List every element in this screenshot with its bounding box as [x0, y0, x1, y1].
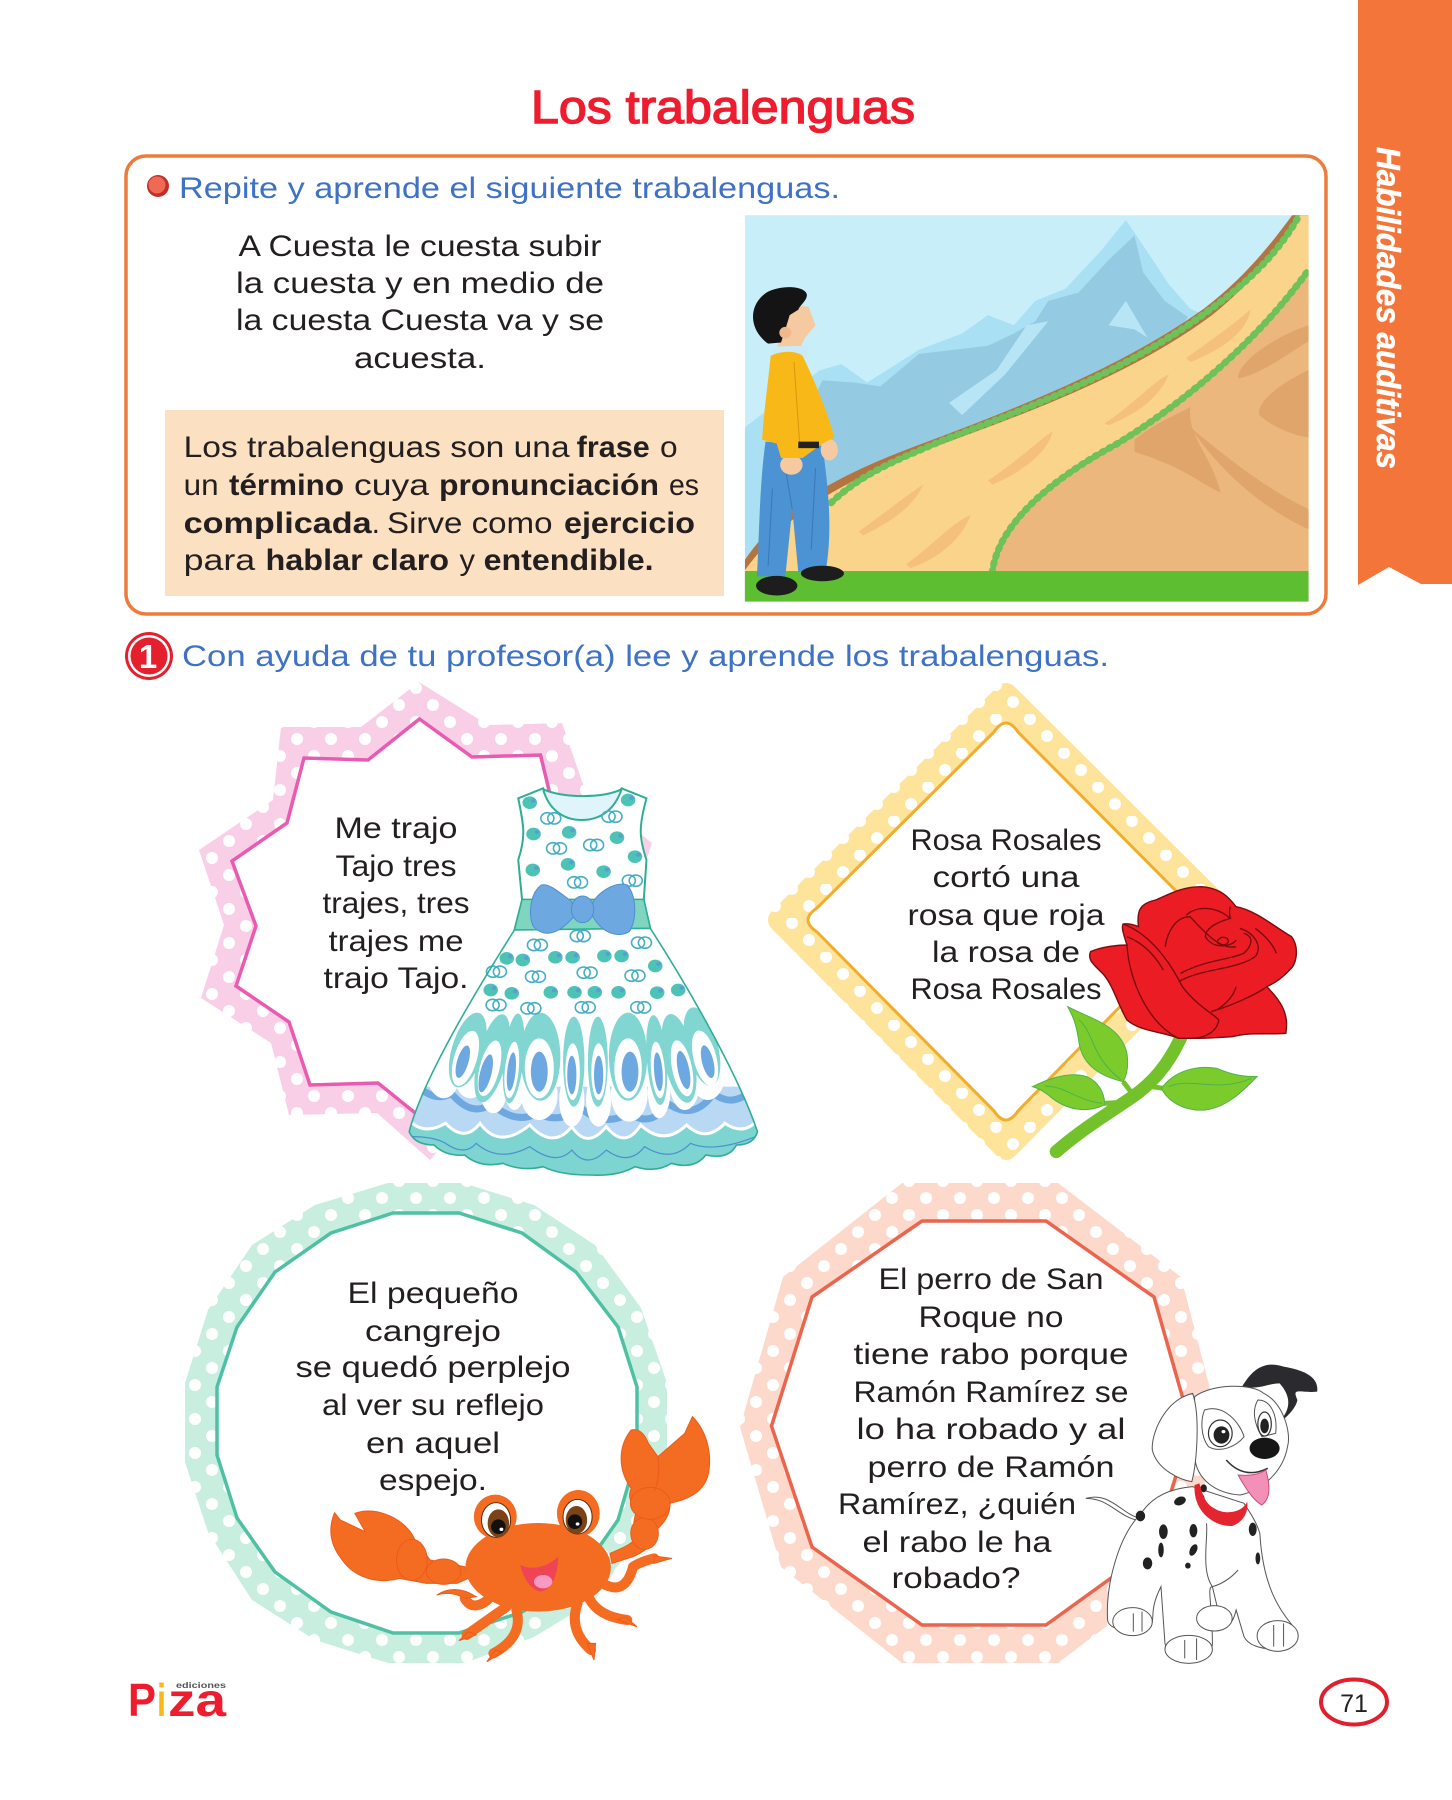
definition callout: y [460, 544, 475, 577]
page number: 71 [1340, 1690, 1368, 1718]
star text: trajes, tres [322, 887, 470, 920]
panel: intro [126, 156, 1326, 614]
diamond text: Rosa Rosales [910, 973, 1102, 1006]
definition callout: entendible. [484, 544, 654, 577]
definition callout: cuya [354, 469, 429, 502]
tongue twister text: A Cuesta le cuesta subir [238, 230, 602, 263]
star text [322, 812, 470, 995]
illustration: crab [331, 1417, 710, 1662]
illustration: dress [407, 788, 759, 1180]
decagon text: perro de Ramón [868, 1451, 1114, 1484]
dress print dots and rings [483, 794, 685, 1014]
diamond frame [780, 695, 1232, 1148]
definition callout: término [229, 469, 344, 502]
dress bow [530, 884, 635, 935]
panel: round tongue twister [185, 1183, 710, 1663]
definition callout: pronunciación [439, 469, 659, 502]
decagon text: Roque no [918, 1301, 1064, 1334]
definition callout: es [669, 469, 699, 502]
logo: Piza ediciones: za [168, 1674, 226, 1726]
round text: se quedó perplejo [296, 1351, 570, 1384]
round frame [185, 1183, 667, 1663]
logo: Piza ediciones [128, 1674, 226, 1726]
diamond text: Rosa Rosales [910, 824, 1102, 857]
definition callout: para [184, 544, 256, 577]
icon: number 1 badge [125, 632, 173, 680]
tongue twister text: acuesta. [354, 342, 486, 375]
star text: trajes me [328, 925, 464, 958]
tongue twister text [236, 230, 604, 375]
definition callout: Los trabalenguas son una [184, 431, 570, 464]
decagon text: tiene rabo porque [854, 1338, 1128, 1371]
panel: decagon tongue twister [740, 1183, 1317, 1663]
decagon text: Ramírez, ¿quién [838, 1488, 1076, 1521]
side tab: Habilidades auditivas [1358, 0, 1452, 585]
panel frame [126, 156, 1326, 614]
tongue twister text: la cuesta Cuesta va y se [236, 304, 604, 337]
decagon text: El perro de San [878, 1263, 1104, 1296]
definition callout: ejercicio [564, 507, 695, 540]
star frame [199, 682, 652, 1160]
decagon text: el rabo le ha [862, 1526, 1052, 1559]
definition callout: frase [577, 431, 650, 464]
illustration: dalmatian puppy [1086, 1365, 1317, 1663]
logo: Piza ediciones: i [157, 1674, 166, 1726]
diamond text: la rosa de [932, 936, 1080, 969]
diamond text: rosa que roja [908, 899, 1105, 932]
peacock feather pattern [441, 1005, 727, 1107]
icon: red bullet [147, 175, 169, 197]
definition callout: . [372, 507, 380, 540]
decagon frame [740, 1183, 1220, 1663]
icon: number 1 badge: 1 [139, 638, 157, 675]
definition callout: complicada [184, 507, 372, 540]
diamond text: cortó una [932, 861, 1080, 894]
diamond text [908, 824, 1105, 1006]
definition callout: Sirve como [387, 507, 552, 540]
activity heading: Con ayuda de tu profesor(a) lee y aprende los trabalenguas. [182, 640, 1109, 673]
star text: trajo Tajo. [324, 962, 468, 995]
page number [1321, 1680, 1387, 1724]
round text [296, 1277, 570, 1497]
round text: cangrejo [365, 1315, 501, 1348]
logo: Piza ediciones: ediciones [176, 1680, 226, 1690]
logo: Piza ediciones: P [128, 1674, 156, 1726]
definition callout: o [660, 431, 678, 464]
decagon text: lo ha robado y al [856, 1413, 1126, 1446]
illustration: boy looking at hill [745, 215, 1309, 602]
side tab: Habilidades auditivas: Habilidades auditivas [1370, 147, 1407, 469]
round text: en aquel [366, 1427, 500, 1460]
star text: Tajo tres [336, 850, 456, 883]
boy figure [753, 287, 844, 596]
illustration: red rose [1032, 887, 1296, 1152]
round text: espejo. [379, 1464, 487, 1497]
round text: El pequeño [348, 1277, 518, 1310]
tongue twister text: la cuesta y en medio de [236, 267, 604, 300]
title: Los trabalenguas [531, 81, 915, 133]
definition callout: hablar claro [266, 544, 449, 577]
decagon text: Ramón Ramírez se [854, 1376, 1128, 1409]
panel: diamond tongue twister [780, 695, 1296, 1152]
panel: star tongue twister [199, 682, 759, 1180]
star text: Me trajo [334, 812, 458, 845]
decagon text [838, 1263, 1128, 1595]
decagon text: robado? [892, 1562, 1020, 1595]
round text: al ver su reflejo [322, 1389, 544, 1422]
definition callout [165, 410, 724, 596]
instruction heading: Repite y aprende el siguiente trabalenguas. [179, 172, 840, 205]
definition callout: un [184, 469, 219, 502]
